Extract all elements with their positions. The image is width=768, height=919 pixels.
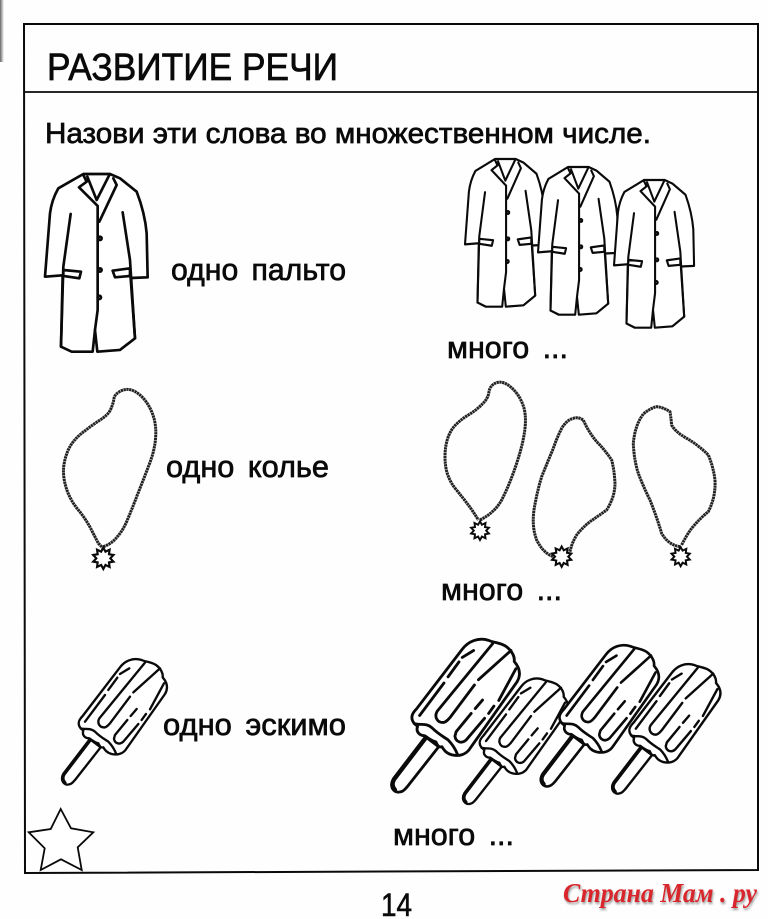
icon: single necklace: [63, 389, 156, 569]
label: many ice creams: много ...: [393, 817, 514, 852]
header rule: [24, 91, 758, 93]
icon: three coats: [465, 159, 694, 328]
icon: three necklaces: [445, 382, 715, 567]
label: many coats: много ...: [447, 330, 568, 365]
icon: single ice cream: [62, 659, 167, 785]
label: one ice cream: одно эскимо: [163, 707, 346, 742]
icon: single coat: [45, 174, 148, 352]
watermark: Страна Мам . ру: [563, 878, 758, 908]
label: many necklaces: много ...: [441, 572, 562, 607]
scan shadow: [0, 0, 4, 62]
label: one necklace: одно колье: [166, 449, 329, 484]
icon: star: [29, 809, 93, 870]
instruction: Назови эти слова во множественном числе.: [45, 118, 651, 150]
label: one coat: одно пальто: [171, 252, 346, 287]
icon: four ice creams: [392, 639, 720, 804]
title: РАЗВИТИЕ РЕЧИ: [47, 47, 338, 89]
